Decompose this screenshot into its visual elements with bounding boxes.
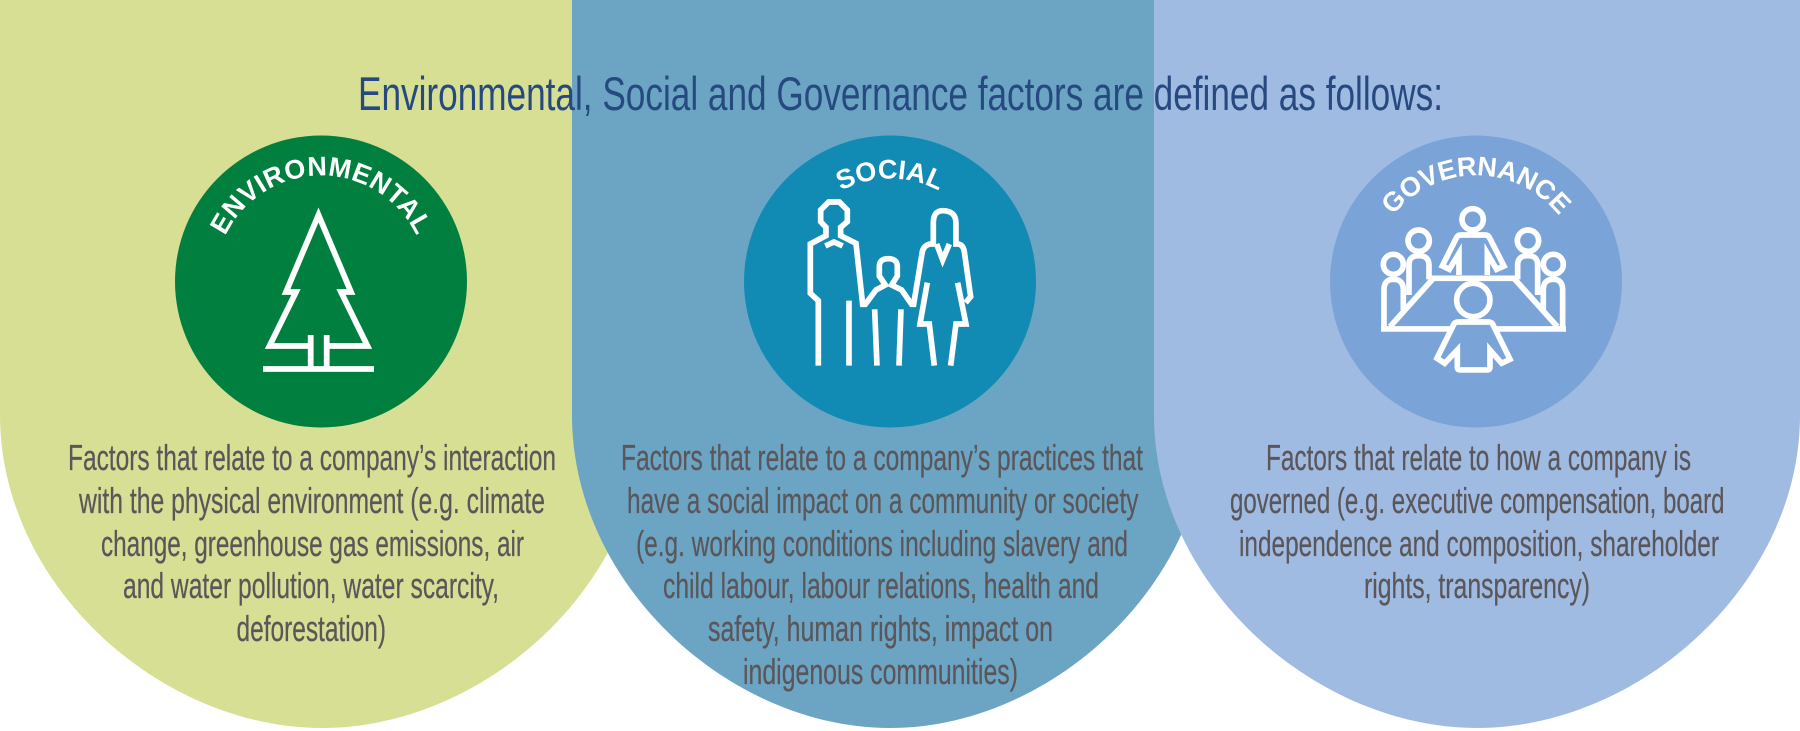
description: environmental: change, greenhouse gas emissions, air xyxy=(101,523,524,564)
panel: environmental xyxy=(0,0,608,728)
description: social xyxy=(621,437,1143,692)
description: social: (e.g. working conditions including slavery and xyxy=(636,523,1128,564)
curved label: social: SOCIAL xyxy=(836,160,940,190)
panel: social xyxy=(572,0,1182,728)
description: social: indigenous communities) xyxy=(743,651,1018,692)
title: Environmental, Social and Governance factors are defined as follows: xyxy=(358,67,1443,120)
icon: tree xyxy=(263,215,374,369)
description: environmental xyxy=(68,437,556,649)
panel: governance xyxy=(1154,0,1800,728)
icon circle: environmental xyxy=(175,136,467,428)
icon: meeting table xyxy=(1381,209,1566,370)
panel background: governance xyxy=(1154,0,1800,728)
description: social: child labour, labour relations, health and xyxy=(663,565,1099,606)
curved label: governance: GOVERNANCE xyxy=(1383,156,1572,215)
icon circle: social xyxy=(744,136,1036,428)
panel background: environmental xyxy=(0,0,644,728)
description: governance xyxy=(1230,437,1724,606)
description: environmental: Factors that relate to a company’s interaction xyxy=(68,437,556,478)
icon circle: governance xyxy=(1330,136,1622,428)
curved label: environmental: ENVIRONMENTAL xyxy=(210,156,428,235)
description: social: have a social impact on a community or society xyxy=(627,480,1138,521)
icon: family xyxy=(810,202,971,366)
description: environmental: with the physical environment (e.g. climate xyxy=(78,480,545,521)
description: environmental: and water pollution, water scarcity, xyxy=(123,565,499,606)
description: social: Factors that relate to a company’s practices that xyxy=(621,437,1143,478)
description: environmental: deforestation) xyxy=(236,608,386,649)
panel background: social xyxy=(572,0,1208,728)
description: social: safety, human rights, impact on xyxy=(708,608,1053,649)
description: governance: rights, transparency) xyxy=(1364,565,1590,606)
